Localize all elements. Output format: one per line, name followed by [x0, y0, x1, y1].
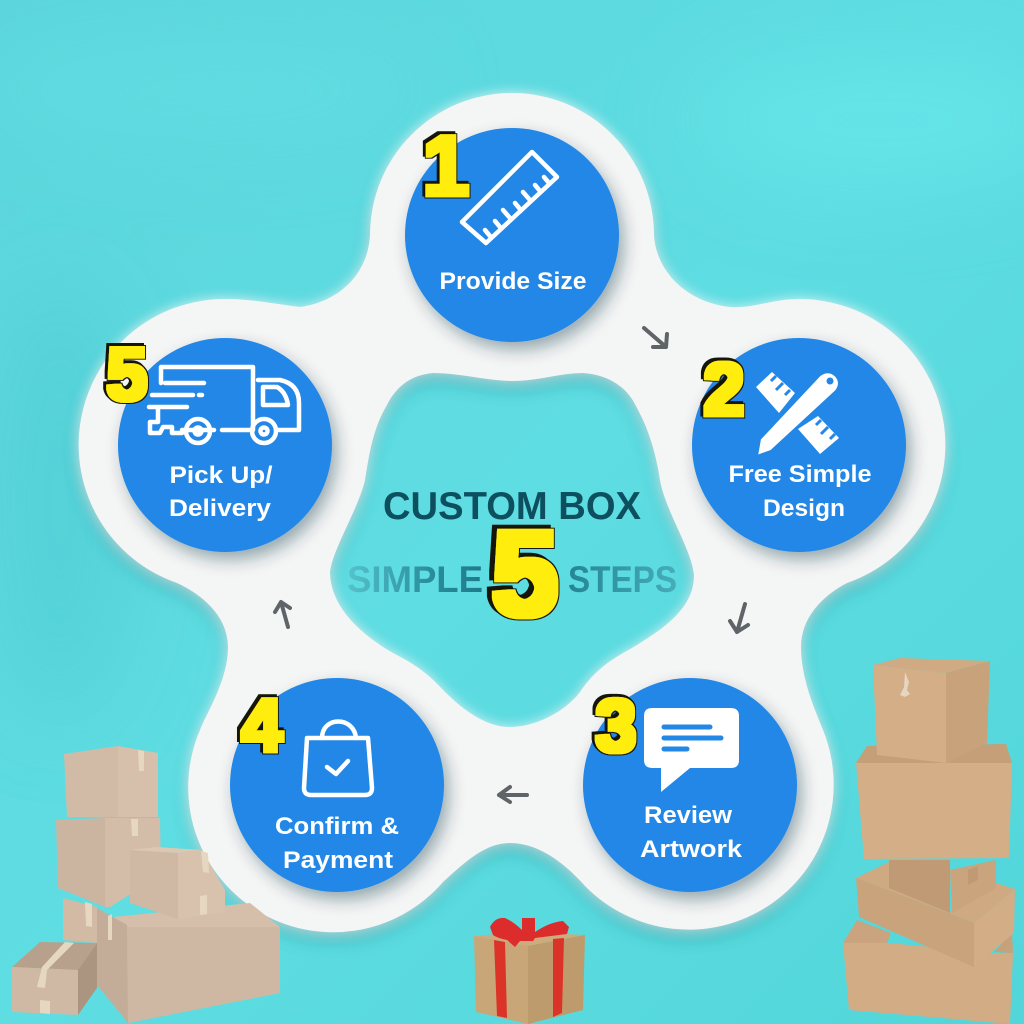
blue circle: [118, 338, 332, 552]
red bow: [490, 918, 569, 947]
small front box: [12, 942, 97, 1015]
icon: shopping bag: [304, 722, 372, 795]
blue circle: [692, 338, 906, 552]
box behind: [63, 898, 97, 943]
label line 2: Delivery: [169, 495, 272, 522]
left face: [474, 936, 528, 1024]
number 2: 2: [703, 348, 745, 431]
step 4: confirm and payment: [230, 678, 444, 892]
blue circle: [230, 678, 444, 892]
number 5: 5: [106, 333, 148, 416]
left stack of boxes: [12, 746, 280, 1023]
arrow: step 2 to 3: [730, 604, 748, 632]
arrow: step 4 to 5: [275, 602, 290, 627]
label: Pick Up/: [170, 462, 273, 489]
gift box: [474, 918, 585, 1024]
label: Free Simple: [728, 461, 872, 488]
number 4: 4: [241, 684, 283, 767]
arrow: step 1 to 2: [644, 328, 667, 347]
right stack of boxes: [843, 658, 1015, 1024]
heading: custom box: CUSTOM BOX: [383, 485, 641, 528]
box lid: [474, 932, 585, 946]
big box: [97, 903, 280, 1023]
blue circle: [405, 128, 619, 342]
subheading: steps: STEPS: [568, 559, 677, 600]
icon: ruler: [462, 152, 557, 243]
step 3: review artwork: [583, 678, 797, 892]
icon: ruler and pencil: [756, 372, 839, 456]
label: Confirm &: [275, 813, 399, 840]
icon: chat bubble: [644, 708, 739, 792]
tape behind: [85, 902, 92, 927]
right face: [528, 935, 585, 1024]
label: Review: [644, 802, 732, 829]
subheading: simple: SIMPLE: [347, 559, 483, 600]
middle right box: [130, 847, 225, 919]
label line 2: Design: [763, 495, 845, 522]
top box: [64, 746, 158, 817]
big number five: 5: [492, 507, 558, 641]
number 3: 3: [595, 684, 637, 767]
second box: [856, 744, 1012, 859]
number 1: 1: [423, 119, 469, 213]
panel: white flower-shaped ring: [79, 93, 945, 932]
step 2: free simple design: [692, 338, 906, 552]
step 1: provide size: [405, 119, 619, 342]
third box: [889, 860, 996, 913]
label line 2: Artwork: [640, 836, 743, 863]
arrow: step 3 to 4: [499, 787, 527, 802]
icon: delivery truck: [149, 367, 299, 443]
bottom box: [843, 920, 1013, 1024]
top box: [873, 658, 990, 763]
step 5: pick up delivery: [106, 333, 332, 552]
fourth box: [856, 862, 1015, 967]
label: Provide Size: [440, 268, 586, 295]
background light bands: [0, 40, 1024, 720]
blue circle: [583, 678, 797, 892]
second box: [56, 818, 161, 907]
red ribbons: [494, 938, 564, 1018]
center title: [347, 485, 677, 641]
label line 2: Payment: [283, 847, 393, 874]
